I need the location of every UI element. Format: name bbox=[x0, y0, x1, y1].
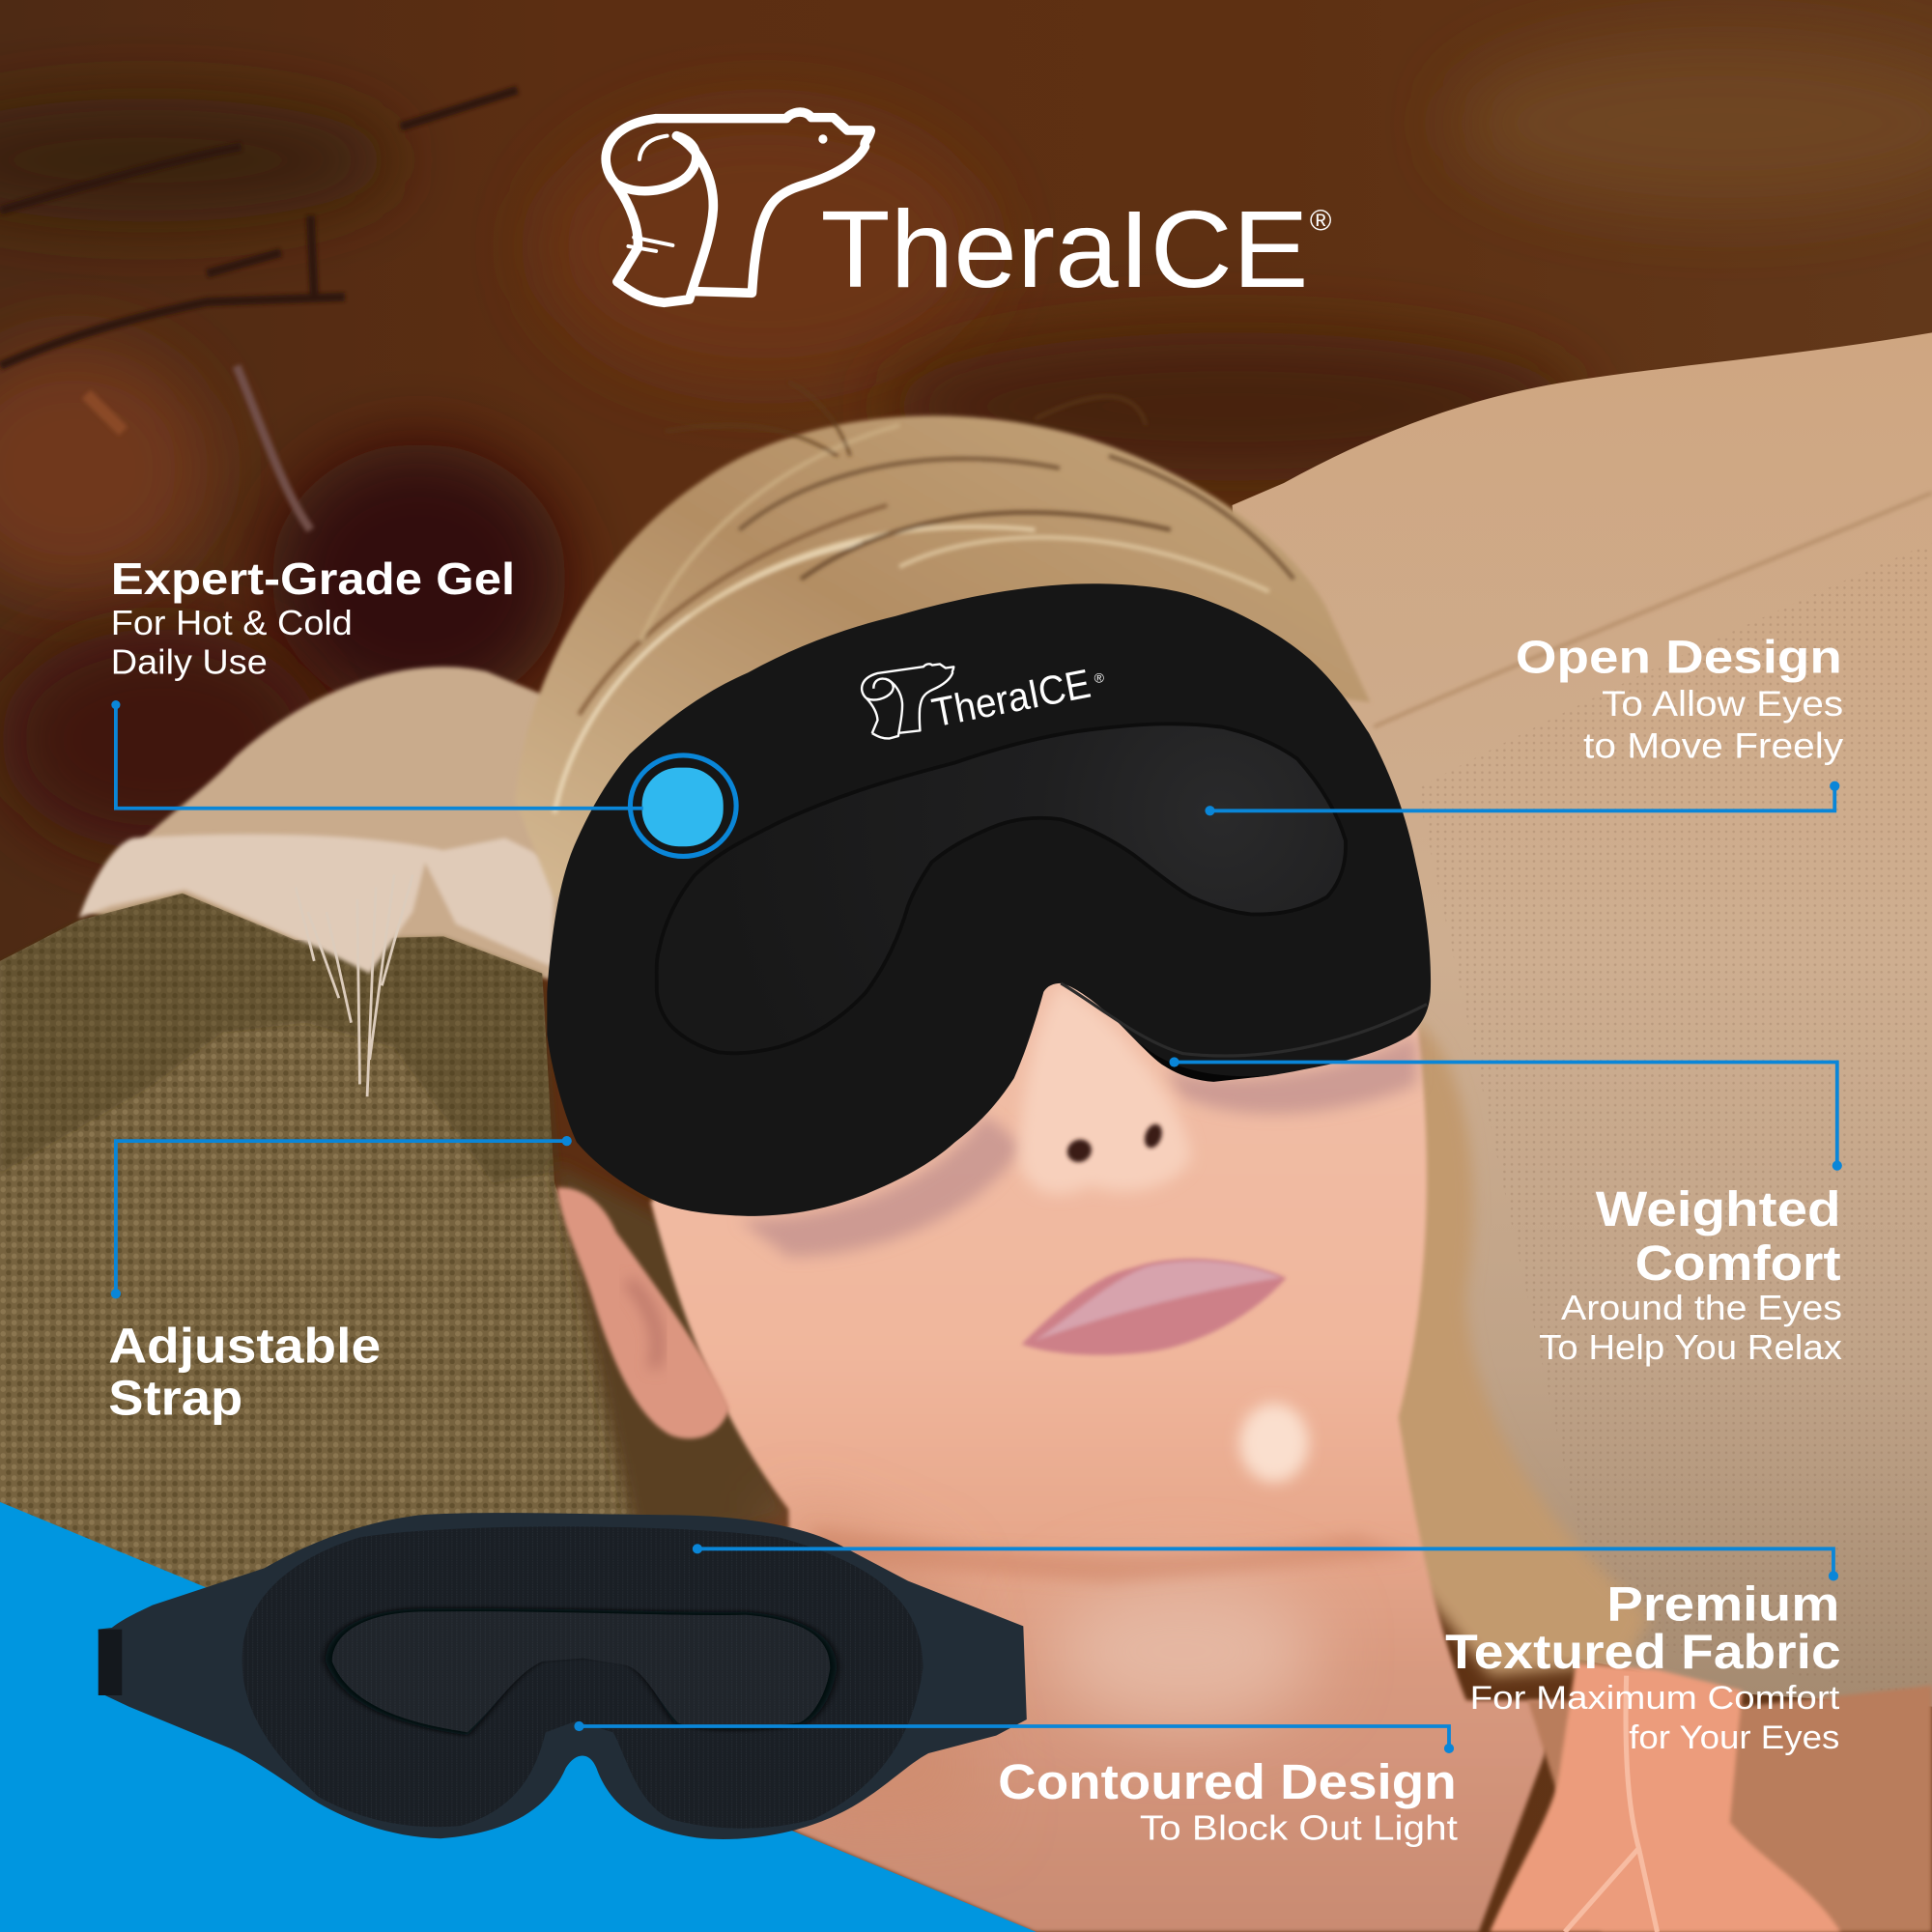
nostrils bbox=[1064, 1122, 1165, 1166]
pillow seam bbox=[1374, 493, 1932, 727]
body line 1: Around the Eyes bbox=[1561, 1289, 1842, 1327]
recess speckle texture bbox=[332, 1611, 830, 1732]
neck left shade bbox=[788, 1509, 985, 1831]
ear bbox=[557, 1187, 729, 1438]
body line 2: Daily Use bbox=[111, 643, 268, 682]
lips bbox=[1021, 1259, 1287, 1355]
leader dots bbox=[111, 1136, 572, 1298]
throat highlight bbox=[1047, 1577, 1319, 1725]
heading: Contoured Design bbox=[998, 1754, 1457, 1809]
nose bbox=[1020, 983, 1191, 1194]
shadow under mask bbox=[739, 1035, 1417, 1257]
hair shadow behind ear bbox=[554, 1164, 788, 1559]
registered mark: ® bbox=[1310, 205, 1332, 238]
heading line 1: Adjustable bbox=[108, 1319, 381, 1374]
leader line bbox=[1210, 786, 1834, 810]
leader line bbox=[116, 705, 643, 809]
gel swatch bbox=[642, 768, 724, 846]
beige knit pillow bbox=[1233, 332, 1932, 1707]
callout: Expert-Grade Gel bbox=[111, 554, 736, 856]
strap and outer shell bbox=[99, 1513, 1027, 1839]
product mask: inside view bbox=[99, 1513, 1027, 1839]
callout: Contoured Design bbox=[574, 1721, 1458, 1847]
eye recess bbox=[332, 1611, 830, 1732]
leader dots bbox=[1169, 1057, 1842, 1171]
leader line bbox=[579, 1726, 1449, 1748]
cream towel bbox=[86, 667, 579, 985]
leader line bbox=[116, 1141, 567, 1293]
heading: Open Design bbox=[1516, 631, 1842, 683]
leader line bbox=[697, 1548, 1833, 1576]
gel ring bbox=[630, 755, 736, 856]
pad speckle texture bbox=[242, 1526, 923, 1829]
towel fringe bbox=[79, 835, 554, 1096]
chin highlight bbox=[1239, 1404, 1309, 1482]
callout: Premium Textured Fabric bbox=[693, 1544, 1841, 1756]
body line 1: For Hot & Cold bbox=[111, 604, 353, 642]
body: To Block Out Light bbox=[1140, 1808, 1458, 1847]
body line 2: to Move Freely bbox=[1583, 725, 1844, 765]
skin: face and neck bbox=[650, 974, 1565, 1932]
hair strands bbox=[554, 382, 1293, 813]
callout: Adjustable Strap bbox=[108, 1136, 572, 1425]
callout: Open Design bbox=[1205, 631, 1844, 815]
body line 2: To Help You Relax bbox=[1539, 1328, 1842, 1367]
leader line bbox=[1175, 1062, 1837, 1166]
callout: Weighted Comfort bbox=[1169, 1057, 1842, 1367]
burlap blanket bbox=[0, 894, 690, 1602]
groove around eye recess bbox=[326, 1608, 837, 1736]
coral shirt collar bbox=[1490, 1663, 1841, 1932]
heading line 2: Strap bbox=[108, 1370, 242, 1425]
small wordmark on mask: TheraICE bbox=[928, 661, 1094, 735]
leader dots bbox=[693, 1544, 1838, 1580]
leader dots bbox=[574, 1721, 1454, 1753]
blonde hair bbox=[515, 415, 1370, 899]
leader dots bbox=[1205, 781, 1839, 815]
small logo on mask bbox=[860, 661, 962, 741]
strap end tab bbox=[99, 1630, 122, 1695]
small registered mark: ® bbox=[1094, 670, 1105, 686]
hair below mask bbox=[1331, 1023, 1651, 1676]
heading line 2: Textured Fabric bbox=[1445, 1625, 1841, 1679]
leader dot bbox=[111, 700, 120, 709]
collar ribbing bbox=[1565, 1676, 1658, 1932]
body line 1: To Allow Eyes bbox=[1602, 684, 1843, 724]
heading line 1: Weighted bbox=[1596, 1181, 1841, 1236]
padded cup bbox=[242, 1526, 923, 1829]
blue corner triangle bbox=[0, 1502, 1037, 1932]
mask binding line bbox=[1061, 983, 1427, 1056]
black sleep mask worn bbox=[547, 583, 1431, 1216]
blanket upper fold shade bbox=[0, 894, 560, 1182]
mask nose shadow bbox=[1140, 1042, 1282, 1082]
body line 2: for Your Eyes bbox=[1629, 1719, 1839, 1756]
shoulder bbox=[1528, 1686, 1932, 1932]
heading: Expert-Grade Gel bbox=[111, 554, 515, 604]
logo: TheraICE bbox=[606, 112, 1332, 311]
body line 1: For Maximum Comfort bbox=[1470, 1680, 1840, 1717]
chin crease bbox=[813, 1528, 1417, 1583]
pillow knit texture bbox=[1417, 542, 1932, 1700]
heading line 1: Premium bbox=[1606, 1577, 1839, 1631]
icon: polar bear bbox=[606, 112, 870, 302]
heading line 2: Comfort bbox=[1635, 1236, 1841, 1291]
mask raised eye cup bbox=[657, 724, 1346, 1053]
wordmark: TheraICE bbox=[820, 188, 1309, 311]
ear inner shade bbox=[629, 1282, 658, 1368]
